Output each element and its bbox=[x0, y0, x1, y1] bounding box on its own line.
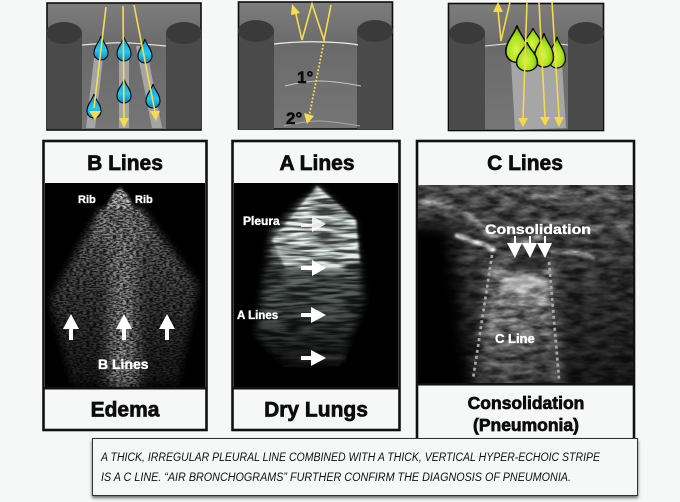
heading: A Lines: A Lines bbox=[279, 152, 355, 175]
label: Pleura: Pleura bbox=[243, 214, 280, 228]
footer: Dry Lungs: Dry Lungs bbox=[264, 398, 368, 422]
ribs bbox=[238, 20, 393, 129]
consolidation drops bbox=[506, 25, 565, 71]
white arrows bbox=[301, 216, 326, 366]
label: A Lines: A Lines bbox=[237, 310, 278, 322]
footer: Consolidation (Pneumonia): Consolidation bbox=[468, 393, 584, 413]
depth labels: 1° bbox=[297, 68, 313, 87]
ultrasound arrows bbox=[89, 5, 160, 128]
white arrows bbox=[63, 314, 175, 340]
pleural line bbox=[485, 43, 568, 46]
panel: C lines diagram bbox=[448, 2, 604, 130]
white arrows bbox=[507, 236, 552, 258]
label: Consolidation: Consolidation bbox=[485, 221, 591, 237]
ultrasound image: B lines bbox=[43, 182, 208, 389]
callout text line 2: IS A C LINE. “AIR BRONCHOGRAMS” FURTHER CONFIRM THE DIAGNOSIS OF PNEUMONIA. bbox=[101, 470, 571, 484]
B line stripes bbox=[86, 46, 162, 128]
ultrasound image: C lines bbox=[418, 185, 633, 383]
pleural line bbox=[82, 43, 166, 46]
zigzag arrow bbox=[291, 4, 331, 124]
footer divider bbox=[43, 387, 207, 390]
C line dotted edges bbox=[473, 255, 559, 379]
footer: Consolidation (Pneumonia): (Pneumonia) bbox=[473, 415, 579, 435]
ultrasound arrows bbox=[493, 2, 564, 127]
C line stripe bbox=[511, 62, 566, 130]
depth labels: 2° bbox=[286, 109, 302, 128]
footer: Edema: Edema bbox=[91, 398, 160, 422]
card: C lines bbox=[400, 141, 635, 441]
pleural and A lines bbox=[274, 42, 361, 126]
label: Rib right: Rib bbox=[135, 194, 153, 206]
footer: Consolidation (Pneumonia) bbox=[468, 393, 584, 435]
card: A lines bbox=[232, 141, 400, 430]
card: B lines bbox=[43, 141, 208, 430]
heading: B Lines: B Lines bbox=[87, 152, 163, 175]
callout text line 1: A THICK, IRREGULAR PLEURAL LINE COMBINED WITH A THICK, VERTICAL HYPER-ECHOIC STRIPE bbox=[100, 450, 601, 464]
label: C Line: C Line bbox=[495, 331, 535, 346]
ultrasound image: A lines bbox=[232, 182, 400, 389]
depth labels bbox=[286, 68, 313, 128]
label: B Lines: B Lines bbox=[98, 356, 149, 372]
water drops bbox=[87, 36, 160, 118]
panel: A lines diagram bbox=[238, 2, 393, 129]
panel: B lines diagram bbox=[46, 3, 202, 130]
callout bbox=[92, 438, 638, 496]
ribs bbox=[46, 22, 202, 129]
label: Rib left: Rib bbox=[78, 194, 96, 206]
ribs bbox=[449, 22, 604, 130]
footer divider bbox=[416, 383, 635, 386]
heading: C Lines: C Lines bbox=[487, 152, 563, 175]
footer divider bbox=[232, 387, 400, 390]
